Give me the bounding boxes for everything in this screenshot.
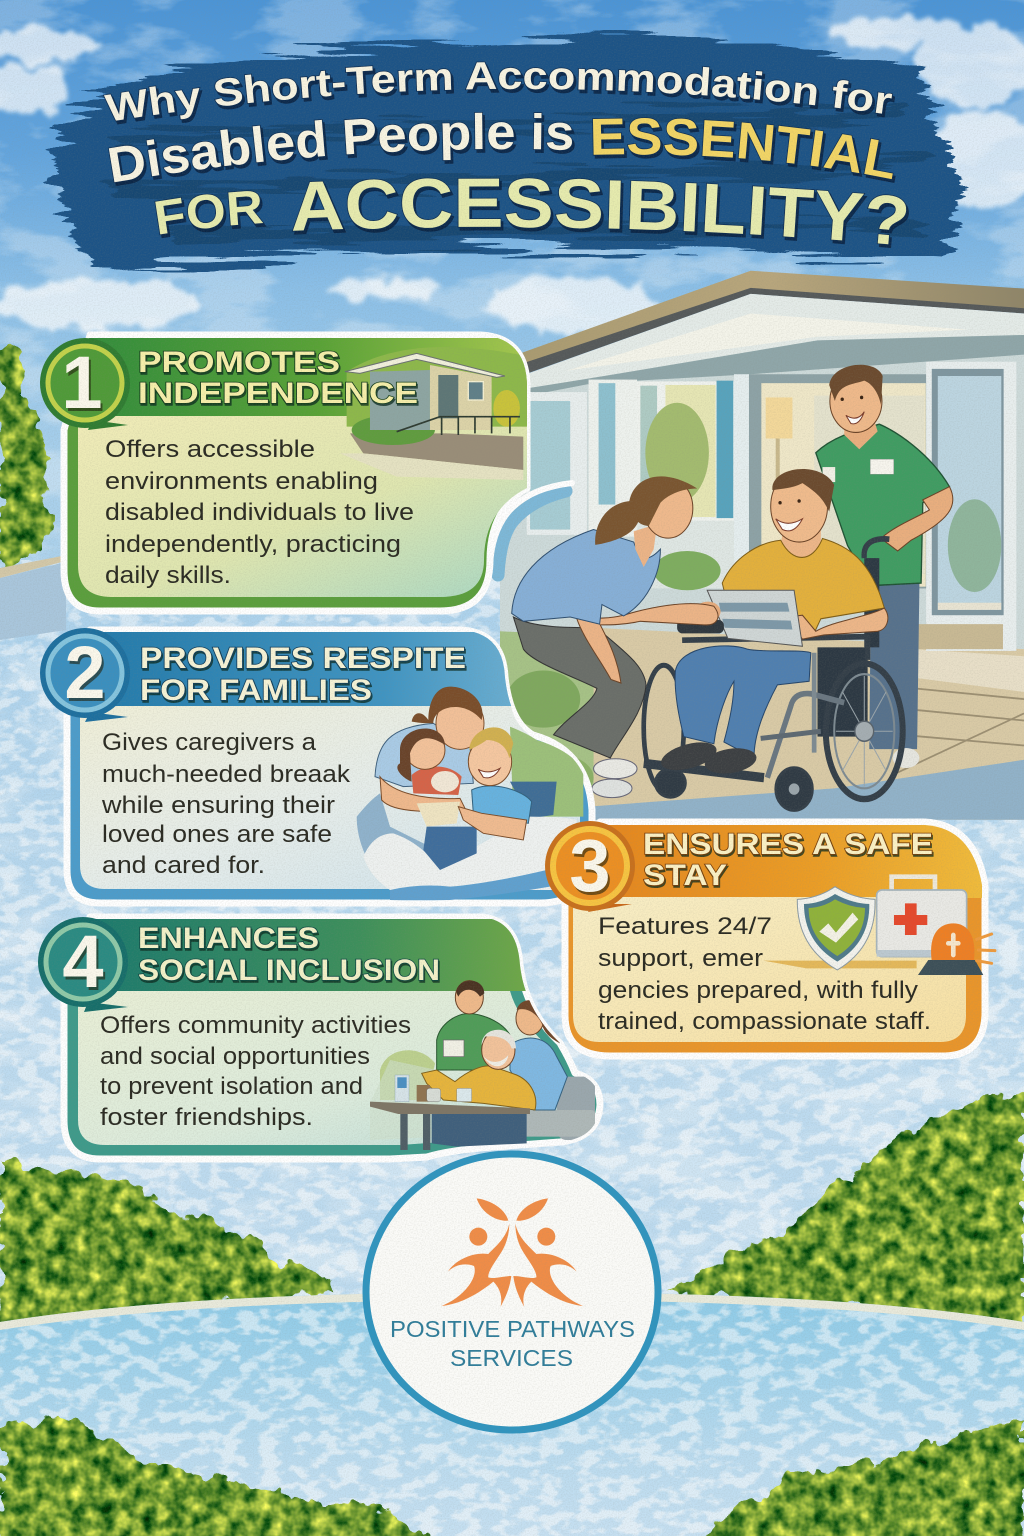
heading: STAY	[643, 859, 727, 892]
main illustration: house, caregivers and wheelchair user	[500, 271, 1024, 820]
near trees right	[693, 1420, 1024, 1536]
body text: and social opportunities	[100, 1043, 370, 1070]
panel 4: enhances social inclusion	[38, 917, 605, 1159]
body text: environments enabling	[105, 468, 378, 495]
number badge 4: 4	[62, 920, 104, 1003]
heading: ENHANCES	[138, 922, 319, 955]
body text: disabled individuals to live	[105, 499, 414, 526]
body text: gencies prepared, with fully	[598, 977, 919, 1004]
body text	[100, 1012, 411, 1131]
heading	[643, 828, 933, 892]
body text: foster friendships.	[100, 1104, 313, 1131]
heading: PROVIDES RESPITE	[140, 642, 466, 675]
heading	[138, 922, 440, 987]
person: woman in blue shirt	[512, 476, 718, 798]
title banner	[43, 30, 968, 272]
roof	[517, 271, 1024, 396]
heading	[140, 642, 466, 707]
title text: ESSENTIAL	[592, 117, 896, 183]
icon: accessible house	[340, 347, 530, 480]
body text: Offers accessible	[105, 436, 315, 463]
panel 2: provides respite for families	[40, 628, 600, 903]
title text: Why Short-Term Accommodation for	[102, 62, 895, 124]
body text: much-needed breaak	[102, 761, 351, 788]
ground and patio	[500, 628, 1024, 820]
body text: independently, practicing	[105, 531, 401, 558]
person: man in yellow shirt	[659, 469, 888, 777]
swoosh between panels	[490, 483, 572, 575]
wheelchair	[644, 539, 903, 810]
body text: trained, compassionate staff.	[598, 1008, 931, 1035]
heading: PROMOTES	[138, 346, 340, 379]
body text	[105, 436, 414, 589]
title text: Disabled People is	[108, 112, 575, 186]
number badge 1	[40, 338, 130, 430]
body text: loved ones are safe	[102, 821, 332, 848]
title text: ACCESSIBILITY?	[292, 178, 909, 248]
far trees right	[668, 1093, 1024, 1330]
alarm light	[918, 923, 995, 975]
number badge 2	[40, 628, 130, 722]
logo badge	[366, 1154, 658, 1430]
body text: support, emer	[598, 945, 763, 972]
number badge 4	[38, 917, 128, 1012]
body text: Offers community activities	[100, 1012, 411, 1039]
background trees and road at left	[0, 345, 66, 640]
lake	[0, 1292, 1024, 1536]
title text: FOR	[154, 190, 266, 238]
panel 3: ensures a safe stay	[545, 821, 995, 1056]
number badge 1: 1	[61, 341, 103, 424]
body text: daily skills.	[105, 562, 231, 589]
number badge 3: 3	[569, 824, 611, 907]
logo text	[390, 1316, 635, 1371]
panel 1: promotes independence	[40, 335, 530, 611]
title text	[102, 62, 909, 248]
icons: shield, first aid kit and alarm	[763, 877, 995, 975]
number badge 3	[545, 821, 635, 912]
logo text: SERVICES	[450, 1345, 573, 1371]
far trees left	[0, 1163, 335, 1330]
body text: Features 24/7	[598, 913, 772, 940]
icon: family hugging	[357, 687, 583, 900]
yellow ground line	[763, 961, 917, 968]
near trees left	[0, 1418, 444, 1536]
icon: friends around a table	[370, 981, 595, 1150]
first aid kit	[877, 877, 967, 957]
heading	[138, 346, 418, 410]
body text	[101, 729, 351, 879]
shield	[797, 887, 875, 970]
body text	[598, 913, 931, 1035]
heading: ENSURES A SAFE	[643, 828, 933, 861]
brush stroke background	[48, 35, 962, 272]
heading: SOCIAL INCLUSION	[138, 954, 440, 987]
house wall	[500, 299, 1024, 656]
heading: FOR FAMILIES	[140, 674, 372, 707]
body text: Gives caregivers a	[102, 729, 316, 756]
body text: and cared for.	[102, 852, 265, 879]
logo text: POSITIVE PATHWAYS	[390, 1316, 635, 1342]
landscape: lake and trees	[0, 1093, 1024, 1536]
person: staff member in green shirt	[816, 365, 953, 768]
number badge 2: 2	[64, 631, 106, 714]
body text: to prevent isolation and	[100, 1073, 363, 1100]
heading: INDEPENDENCE	[138, 377, 418, 410]
logo mark: two figures with leaves	[442, 1198, 583, 1307]
body text: while ensuring their	[101, 792, 335, 819]
windows	[527, 362, 1016, 651]
